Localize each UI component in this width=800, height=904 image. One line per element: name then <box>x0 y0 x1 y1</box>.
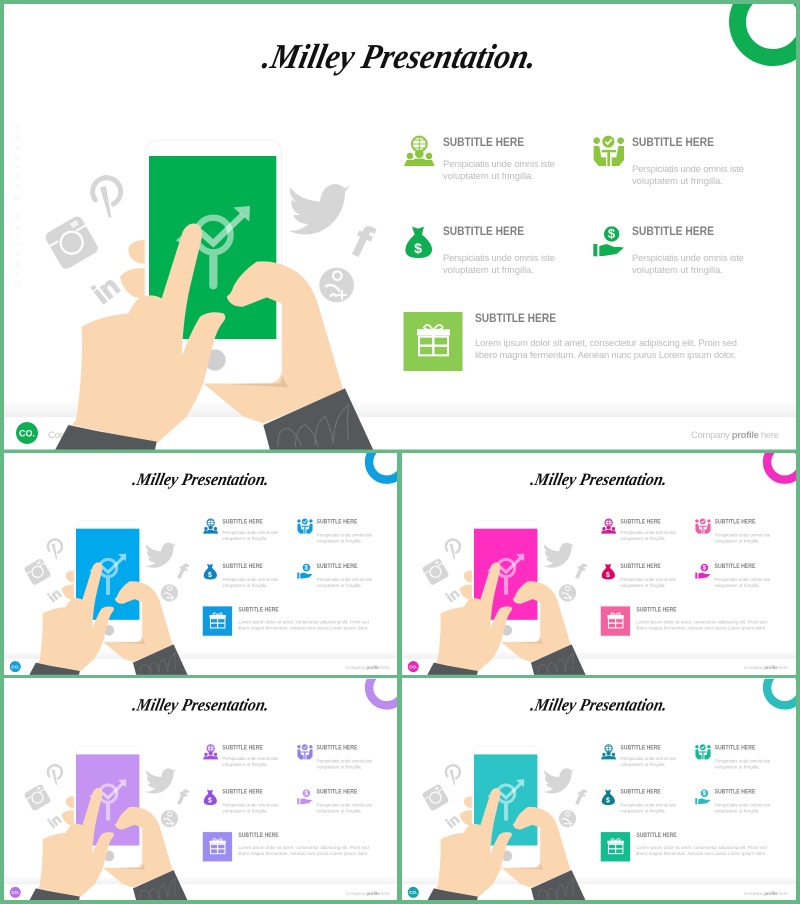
block 5 <box>238 833 369 856</box>
block 5: Lorem ipsum dolor sit amet, consectetur adipiscing elit. Proin sed <box>475 337 737 348</box>
footer badge <box>10 661 21 672</box>
block 1: SUBTITLE HERE <box>222 745 263 751</box>
footer band <box>4 876 398 884</box>
title: .Milley Presentation. <box>529 469 669 489</box>
panel: green slide <box>4 0 800 450</box>
block 4 <box>715 564 771 588</box>
block 1: Perspiciatis unde omnis iste <box>222 756 279 761</box>
icon: coin in hand: $ <box>305 790 309 797</box>
footer badge: CO. <box>19 428 35 438</box>
footer badge: CO. <box>11 890 19 895</box>
corner ring <box>364 453 397 484</box>
block 2 <box>715 520 771 544</box>
icon: coin in hand <box>695 564 711 579</box>
block 1: SUBTITLE HERE <box>443 135 524 149</box>
footer band <box>4 409 796 417</box>
icon: money bag: $ <box>208 572 212 579</box>
block 3: SUBTITLE HERE <box>222 790 263 796</box>
social icon: facebook: f <box>571 558 589 584</box>
block 5: SUBTITLE HERE <box>636 833 677 839</box>
icon: meeting <box>297 744 313 759</box>
block 5: Lorem ipsum dolor sit amet, consectetur adipiscing elit. Proin sed <box>636 845 767 850</box>
block 1: voluptatem ut fringilla. <box>443 170 534 181</box>
block 2: voluptatem ut fringilla. <box>715 539 760 544</box>
block 3: SUBTITLE HERE <box>222 564 263 570</box>
block 1 <box>620 520 677 541</box>
block 2: SUBTITLE HERE <box>317 520 357 526</box>
block 3: SUBTITLE HERE <box>443 224 524 238</box>
block 4: SUBTITLE HERE <box>715 790 755 796</box>
title: .Milley Presentation. <box>259 36 541 76</box>
block 3: voluptatem ut fringilla. <box>222 809 268 814</box>
icon: coin in hand <box>593 226 624 256</box>
icon: gift box <box>601 606 630 636</box>
block 3: Perspiciatis unde omnis iste <box>620 577 677 582</box>
block 4: voluptatem ut fringilla. <box>632 264 723 275</box>
footer text right: Company profile here <box>346 891 390 897</box>
block 2: voluptatem ut fringilla. <box>632 175 723 186</box>
footer badge: CO. <box>11 664 19 669</box>
footer badge: CO. <box>409 890 417 895</box>
block 4: voluptatem ut fringilla. <box>317 809 362 814</box>
icon: money bag: $ <box>606 572 610 579</box>
block 2: Perspiciatis unde omnis iste <box>715 758 771 763</box>
block 2 <box>317 520 373 544</box>
block 3: voluptatem ut fringilla. <box>443 264 534 275</box>
block 5: SUBTITLE HERE <box>636 607 677 613</box>
block 5: SUBTITLE HERE <box>475 311 556 325</box>
block 5: libero magna fermentum. Aenean nunc purus Lorem ipsum dolor. <box>636 851 766 856</box>
side label: Creative Business <box>13 125 22 287</box>
social icon: linkedin: in <box>87 270 125 310</box>
subtitle blocks <box>203 519 373 636</box>
footer badge <box>408 661 419 672</box>
block 1: voluptatem ut fringilla. <box>620 762 666 767</box>
block 3 <box>620 790 677 814</box>
block 3: voluptatem ut fringilla. <box>222 583 268 588</box>
block 2: SUBTITLE HERE <box>715 745 755 751</box>
footer text right: Company profile here <box>691 430 779 441</box>
block 4 <box>632 224 744 275</box>
block 4: voluptatem ut fringilla. <box>715 809 760 814</box>
panel: pink slide <box>402 444 800 675</box>
block 1: Perspiciatis unde omnis iste <box>222 530 279 535</box>
block 3 <box>620 564 677 588</box>
icon: money bag: $ <box>414 240 422 256</box>
block 4: Perspiciatis unde omnis iste <box>715 803 771 808</box>
block 5 <box>636 607 767 630</box>
block 1 <box>222 745 279 767</box>
footer text right: Company profile here <box>346 665 390 671</box>
icon: money bag <box>204 564 217 579</box>
icon: coin in hand <box>297 564 313 579</box>
icon: meeting <box>297 519 313 534</box>
block 5: Lorem ipsum dolor sit amet, consectetur adipiscing elit. Proin sed <box>238 845 369 850</box>
block 2: SUBTITLE HERE <box>715 520 755 526</box>
title: .Milley Presentation. <box>529 695 669 715</box>
footer text left: Company profile here <box>48 430 136 441</box>
social icon: facebook: f <box>173 558 191 584</box>
phone and hands illustration <box>421 746 586 901</box>
block 3: Perspiciatis unde omnis iste <box>443 252 555 263</box>
block 3: voluptatem ut fringilla. <box>620 583 666 588</box>
footer text right: Company profile here <box>744 665 788 671</box>
block 2 <box>632 135 744 186</box>
block 5 <box>636 833 767 856</box>
block 2: SUBTITLE HERE <box>317 745 357 751</box>
corner ring <box>369 670 404 705</box>
block 1: Perspiciatis unde omnis iste <box>443 158 555 169</box>
block 4: SUBTITLE HERE <box>317 790 357 796</box>
block 3 <box>222 790 279 814</box>
icon: globe team <box>601 745 616 759</box>
block 4 <box>317 564 373 588</box>
block 1: Perspiciatis unde omnis iste <box>620 530 677 535</box>
block 5: Lorem ipsum dolor sit amet, consectetur adipiscing elit. Proin sed <box>238 619 369 624</box>
footer badge <box>10 887 21 898</box>
block 3: Perspiciatis unde omnis iste <box>222 803 279 808</box>
block 4: voluptatem ut fringilla. <box>317 583 362 588</box>
panel: blue slide <box>4 444 404 675</box>
block 5: Lorem ipsum dolor sit amet, consectetur adipiscing elit. Proin sed <box>636 619 767 624</box>
icon: meeting <box>593 136 624 166</box>
block 4: Perspiciatis unde omnis iste <box>632 252 744 263</box>
block 1: SUBTITLE HERE <box>620 520 661 526</box>
block 4: Perspiciatis unde omnis iste <box>715 577 771 582</box>
icon: money bag: $ <box>606 798 610 805</box>
panel: purple slide <box>4 670 404 901</box>
social icon: facebook: f <box>571 784 589 810</box>
subtitle blocks <box>601 519 771 636</box>
footer band <box>402 876 796 884</box>
icon: globe team <box>203 519 218 534</box>
block 1: voluptatem ut fringilla. <box>222 536 268 541</box>
social icon: linkedin: in <box>443 811 462 831</box>
social icon: facebook: f <box>173 784 191 810</box>
icon: meeting <box>695 744 711 759</box>
block 2: voluptatem ut fringilla. <box>715 764 760 769</box>
icon: gift box <box>203 606 232 636</box>
block 2: SUBTITLE HERE <box>632 135 714 149</box>
icon: gift box <box>601 832 630 861</box>
icon: money bag <box>204 790 217 805</box>
phone and hands illustration <box>23 746 188 901</box>
icon: meeting <box>695 519 711 534</box>
block 2: Perspiciatis unde omnis iste <box>632 163 744 174</box>
block 5: libero magna fermentum. Aenean nunc purus Lorem ipsum dolor. <box>475 349 736 360</box>
block 1: SUBTITLE HERE <box>620 745 661 751</box>
subtitle blocks <box>404 135 744 371</box>
social icon: linkedin: in <box>443 585 462 605</box>
block 4 <box>715 790 771 814</box>
block 1: Perspiciatis unde omnis iste <box>620 756 677 761</box>
block 1: voluptatem ut fringilla. <box>620 536 666 541</box>
icon: coin in hand <box>695 789 711 804</box>
block 2: Perspiciatis unde omnis iste <box>317 758 373 763</box>
block 4: voluptatem ut fringilla. <box>715 583 760 588</box>
icon: coin in hand: $ <box>305 565 309 572</box>
subtitle blocks <box>203 744 373 861</box>
block 1 <box>443 135 555 181</box>
subtitle blocks <box>601 744 771 861</box>
block 4: Perspiciatis unde omnis iste <box>317 803 373 808</box>
icon: money bag <box>405 227 432 258</box>
block 1 <box>222 520 279 541</box>
icon: globe team <box>404 137 435 166</box>
title: .Milley Presentation. <box>131 695 271 715</box>
social icon: linkedin: in <box>45 585 64 605</box>
block 1: SUBTITLE HERE <box>222 520 263 526</box>
block 1: voluptatem ut fringilla. <box>222 762 268 767</box>
phone and hands illustration <box>23 521 188 675</box>
footer band <box>4 655 397 658</box>
icon: coin in hand <box>297 789 313 804</box>
block 5: libero magna fermentum. Aenean nunc purus Lorem ipsum dolor. <box>636 625 766 630</box>
block 3: Perspiciatis unde omnis iste <box>222 577 279 582</box>
icon: gift box <box>404 312 462 371</box>
block 4: Perspiciatis unde omnis iste <box>317 577 373 582</box>
block 5: libero magna fermentum. Aenean nunc purus Lorem ipsum dolor. <box>238 625 368 630</box>
footer badge <box>408 887 419 898</box>
phone and hands illustration <box>43 140 373 450</box>
block 2: Perspiciatis unde omnis iste <box>715 533 771 538</box>
block 5: SUBTITLE HERE <box>238 833 279 839</box>
block 2: voluptatem ut fringilla. <box>317 764 362 769</box>
block 5: libero magna fermentum. Aenean nunc purus Lorem ipsum dolor. <box>238 851 368 856</box>
icon: money bag: $ <box>208 798 212 805</box>
corner ring <box>738 0 800 58</box>
block 4 <box>317 790 373 814</box>
icon: coin in hand: $ <box>703 565 707 572</box>
icon: money bag <box>602 564 615 579</box>
corner ring <box>767 670 800 705</box>
block 1 <box>620 745 677 767</box>
icon: globe team <box>601 519 616 534</box>
block 2: voluptatem ut fringilla. <box>317 539 362 544</box>
icon: gift box <box>203 832 232 861</box>
block 2: Perspiciatis unde omnis iste <box>317 533 373 538</box>
social icon: facebook: f <box>345 217 379 267</box>
block 3: voluptatem ut fringilla. <box>620 809 666 814</box>
block 2 <box>317 745 373 769</box>
block 4: SUBTITLE HERE <box>715 564 755 570</box>
social icon: linkedin: in <box>45 811 64 831</box>
block 3: SUBTITLE HERE <box>620 564 661 570</box>
block 5 <box>238 607 369 630</box>
block 3: Perspiciatis unde omnis iste <box>620 803 677 808</box>
icon: coin in hand: $ <box>608 226 616 241</box>
footer badge: CO. <box>409 664 417 669</box>
panel: teal slide <box>402 670 800 901</box>
icon: globe team <box>203 745 218 759</box>
corner ring <box>767 444 800 480</box>
block 5: SUBTITLE HERE <box>238 607 279 613</box>
block 3 <box>443 224 555 275</box>
icon: money bag <box>602 790 615 805</box>
block 4: SUBTITLE HERE <box>317 564 357 570</box>
footer badge <box>16 422 38 444</box>
title: .Milley Presentation. <box>131 469 271 489</box>
icon: coin in hand: $ <box>703 790 707 797</box>
block 5 <box>475 311 737 360</box>
block 3 <box>222 564 279 588</box>
phone and hands illustration <box>421 521 586 675</box>
block 2 <box>715 745 771 769</box>
block 3: SUBTITLE HERE <box>620 790 661 796</box>
footer text right: Company profile here <box>744 891 788 897</box>
footer band <box>402 650 796 659</box>
block 4: SUBTITLE HERE <box>632 224 714 238</box>
